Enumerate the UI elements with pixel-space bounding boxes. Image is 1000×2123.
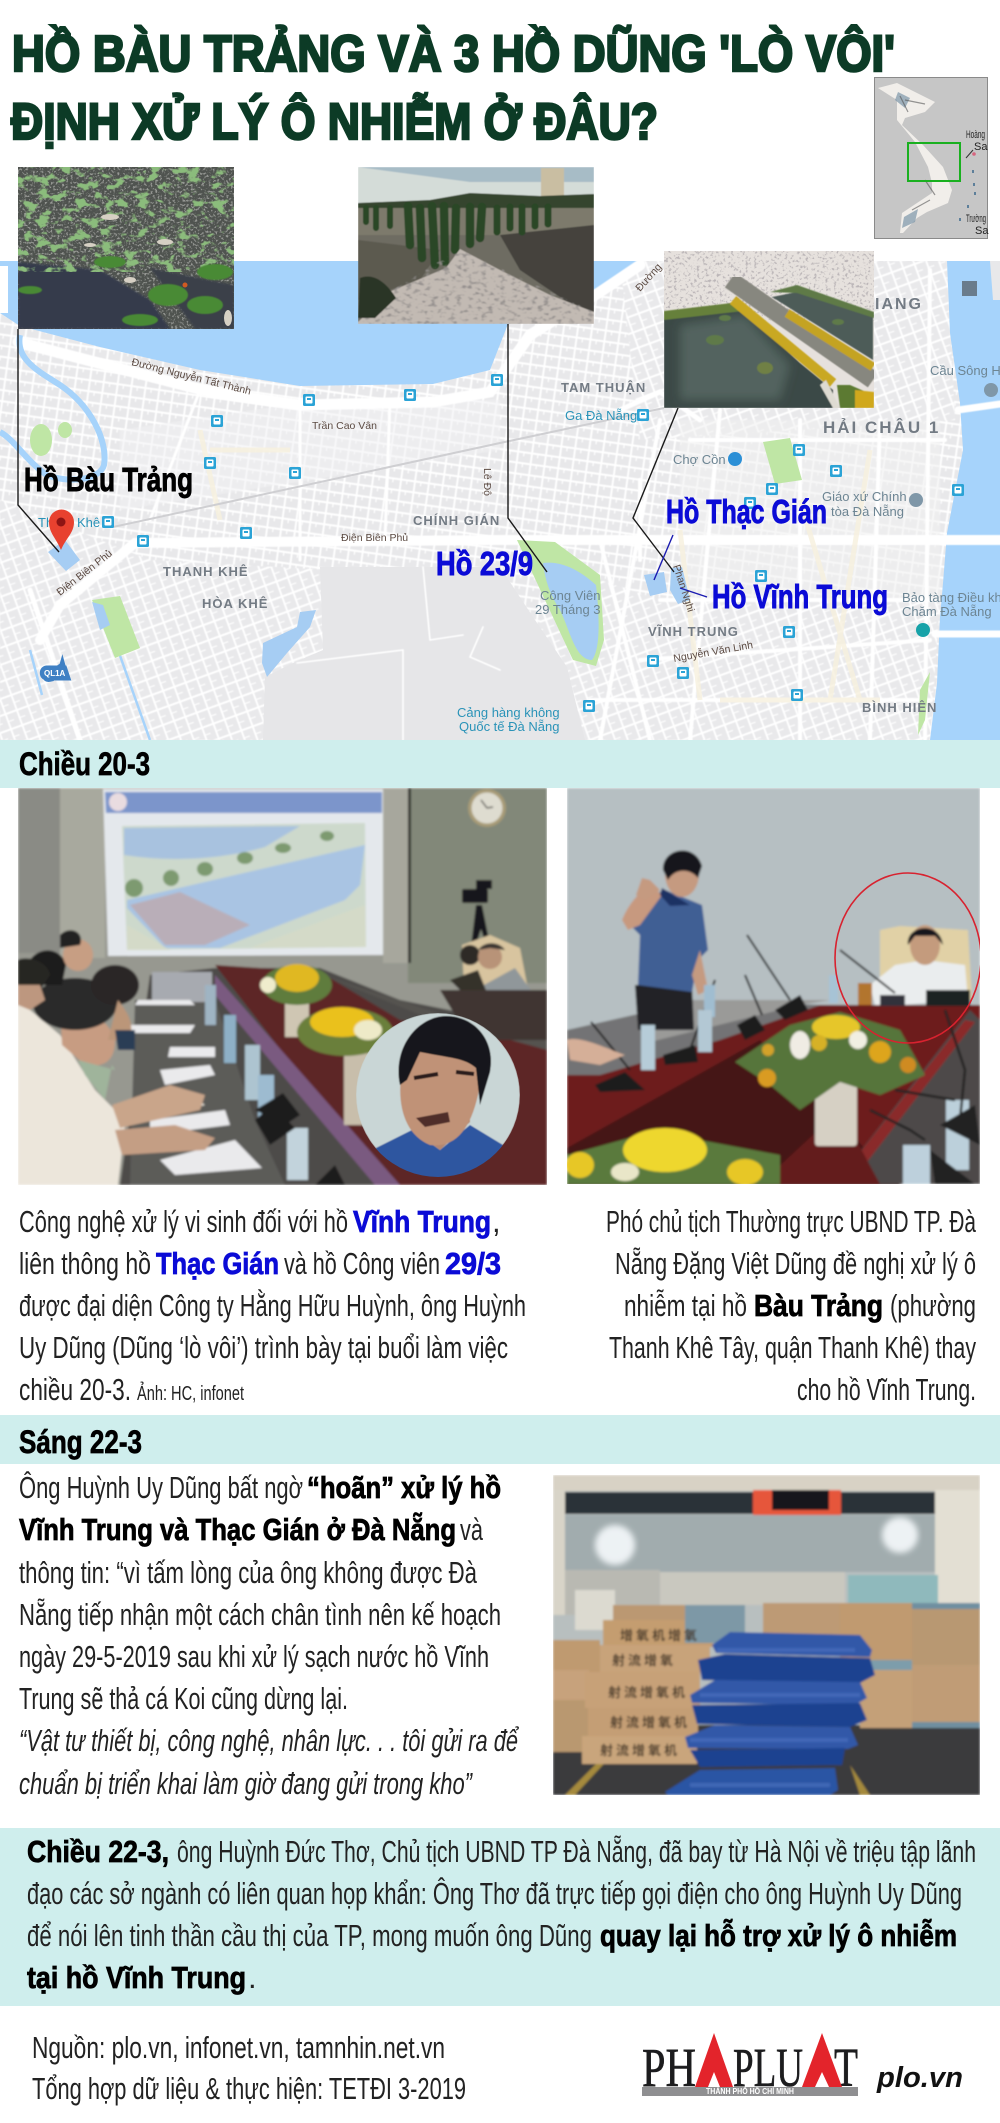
text: morning 22-3: chuẩn bị triển khai làm giờ đang gửi trong kho”	[19, 1766, 473, 1801]
map labels: Phan Nghi	[670, 563, 697, 614]
box lettering: 射流增氧	[612, 1653, 676, 1668]
text: technology caption: Công nghệ xử lý vi sinh đối với hồ	[19, 1204, 348, 1239]
grid icon	[962, 281, 977, 296]
map labels: Khê	[77, 515, 100, 530]
seated vice chairman	[840, 925, 972, 1006]
inset map of Vietnam: Sa	[975, 225, 989, 237]
white search box	[0, 266, 8, 313]
map labels: TAM THUẬN	[561, 380, 646, 395]
map labels: THANH KHÊ	[163, 564, 249, 579]
inset map of Vietnam: Hoàng	[966, 129, 985, 141]
microphones and bottles	[567, 935, 980, 1184]
text: morning 22-3: Ông Huỳnh Uy Dũng bất ngờ	[19, 1470, 303, 1505]
photo: dead fish at lake 23/9	[358, 167, 594, 324]
inset map of Vietnam: Sa	[974, 141, 988, 153]
left side attendees	[18, 930, 215, 1185]
logo: Phap Luat	[642, 2033, 858, 2098]
map labels: Điện Biên Phủ	[54, 547, 115, 598]
panel: afternoon 22-3: để nói lên tinh thần cầu thị của TP, mong muốn ông Dũng	[27, 1918, 592, 1953]
text: technology caption: 29/3	[445, 1246, 501, 1281]
label: Ho Bau Trang: Hồ Bàu Trảng	[24, 461, 193, 498]
text: vice chairman caption	[606, 1204, 977, 1407]
map pin	[49, 509, 74, 550]
map labels: QL1A	[44, 669, 66, 678]
right side attendees	[440, 935, 547, 1040]
airport area	[263, 567, 585, 740]
photo: aerial view of lakes	[664, 251, 874, 408]
clock	[468, 789, 506, 827]
river east	[930, 261, 1000, 740]
map labels: Chợ Cồn	[673, 452, 726, 467]
map labels: tòa Đà Nẵng	[831, 504, 904, 519]
text: morning 22-3: Vĩnh Trung và Thạc Gián ở Đà Nẵng	[19, 1511, 456, 1547]
river canals west	[0, 335, 150, 740]
text: morning 22-3: “Vật tư thiết bị, công nghệ, nhân lực. . . tôi gửi ra để	[19, 1723, 519, 1758]
vases and flowers	[260, 964, 393, 1125]
railway	[113, 408, 664, 527]
lakes	[48, 540, 690, 677]
photo: Bau Trang lake	[18, 167, 234, 329]
text: technology caption: được đại diện Công ty Hằng Hữu Huỳnh, ông Huỳnh	[19, 1288, 526, 1323]
section bar: Chieu 20-3: Chiều 20-3	[19, 746, 150, 782]
logo: Phap Luat: T	[834, 2037, 858, 2098]
conference table	[119, 966, 457, 1185]
map labels: Cầu Sông H	[930, 363, 1000, 378]
label: Ho Thac Gian: Hồ Thạc Gián	[666, 493, 827, 530]
box lettering: 增氧机增氧	[620, 1628, 700, 1643]
inset portrait of Huynh Uy Dung	[356, 1013, 520, 1182]
map labels: Giáo xứ Chính	[822, 489, 907, 504]
map labels: Quốc tế Đà Nẵng	[459, 719, 559, 734]
text: technology caption: Ảnh: HC, infonet	[137, 1382, 244, 1405]
map labels: Lê Độ	[481, 468, 493, 496]
text: technology caption: và hồ Công viên	[284, 1246, 440, 1281]
map labels: CHÍNH GIÁN	[413, 513, 500, 528]
label: Ho 23/9: Hồ 23/9	[436, 545, 533, 582]
map labels: Đường Nguyễn Tất Thành	[130, 355, 253, 398]
map labels: Trần Cao Vân	[312, 420, 377, 432]
text: morning 22-3: Nẵng tiếp nhận một cách chân tình nên kế hoạch	[19, 1597, 501, 1632]
source credits: Tổng hợp dữ liệu & thực hiện: TETĐI 3-2019	[32, 2071, 466, 2106]
panel: afternoon 22-3	[0, 1828, 1000, 2006]
logo: Phap Luat: THÀNH PHỐ HỒ CHÍ MINH	[706, 2086, 794, 2096]
map labels: Điện Biên Phủ	[341, 532, 408, 544]
video camera	[461, 879, 493, 942]
bus stop icons	[102, 374, 964, 712]
front flowers	[566, 1128, 780, 1185]
text: technology caption	[19, 1204, 526, 1407]
source credits	[32, 2030, 466, 2106]
map labels: BÌNH HIÊN	[862, 700, 937, 715]
map labels: Công Viên	[540, 588, 600, 603]
main roads	[18, 265, 1000, 740]
text: technology caption: Vĩnh Trung	[353, 1204, 491, 1239]
map of Da Nang	[0, 255, 1000, 745]
papers	[130, 1000, 262, 1175]
text: morning 22-3: “hoãn” xử lý hồ	[307, 1470, 501, 1505]
map labels: 29 Tháng 3	[535, 602, 601, 617]
map labels: Chăm Đà Nẵng	[902, 604, 992, 619]
map labels: Nguyễn Văn Linh	[672, 638, 754, 665]
map labels: IANG	[875, 296, 923, 313]
main vase and flower arrangement	[735, 1012, 925, 1146]
blue label leader lines	[654, 535, 707, 597]
section bar: Sang 22-3: Sáng 22-3	[19, 1424, 142, 1460]
standing man	[622, 851, 708, 1030]
photo: meeting with Huynh Uy Dung	[18, 788, 547, 1185]
title: HỒ BÀU TRẢNG VÀ 3 HỒ DŨNG 'LÒ VÔI'	[12, 24, 895, 82]
map labels: VĨNH TRUNG	[648, 624, 739, 639]
projector screen	[103, 789, 383, 956]
box lettering: 射流增氧机	[608, 1685, 688, 1700]
text: morning 22-3: Trung sẽ thả cá Koi cũng dừng lại.	[19, 1681, 348, 1716]
green parks	[30, 422, 930, 735]
logo: Phap Luat: PH	[642, 2037, 696, 2098]
map labels: HÒA KHÊ	[202, 596, 268, 611]
text: morning 22-3	[19, 1470, 519, 1801]
section bar: Chieu 20-3	[0, 740, 1000, 788]
panel: afternoon 22-3: .	[248, 1960, 257, 1995]
logo: plo.vn: plo.vn	[876, 2062, 963, 2094]
text: vice chairman caption: Bàu Trảng	[754, 1288, 883, 1323]
bottles and microphones	[205, 985, 345, 1185]
source credits: Nguồn: plo.vn, infonet.vn, tamnhin.net.vn	[32, 2030, 445, 2065]
blue floats stack	[665, 1632, 875, 1795]
map labels: HẢI CHÂU 1	[823, 418, 940, 437]
panel: afternoon 22-3: Chiều 22-3,	[27, 1834, 169, 1869]
map labels: Ga Đà Nẵng	[565, 408, 637, 423]
cardboard boxes	[553, 1603, 980, 1764]
map labels: Bảo tàng Điều kh	[902, 590, 1000, 605]
text: technology caption: ,	[492, 1204, 501, 1239]
inset map of Vietnam	[874, 78, 989, 238]
text: technology caption: liên thông hồ	[19, 1246, 151, 1281]
text: technology caption: Thạc Gián	[156, 1246, 279, 1281]
text: technology caption: chiều 20-3.	[19, 1372, 131, 1407]
warm side roads	[200, 430, 880, 700]
box lettering: 射流增氧机	[600, 1743, 680, 1758]
pointer lines to lakes	[18, 324, 678, 572]
map labels: Cảng hàng không	[457, 705, 560, 720]
text: morning 22-3: và	[460, 1512, 484, 1547]
text: morning 22-3: ngày 29-5-2019 sau khi xử lý sạch nước hồ Vĩnh	[19, 1639, 489, 1674]
text: vice chairman caption: nhiễm tại hồ	[624, 1288, 747, 1323]
photo: equipment in warehouse	[553, 1475, 980, 1795]
map labels: Đường	[633, 261, 665, 294]
title: ĐỊNH XỬ LÝ Ô NHIỄM Ở ĐÂU?	[11, 92, 658, 150]
section bar: Sang 22-3	[0, 1415, 1000, 1464]
photo: vice chairman at meeting	[566, 788, 981, 1185]
floor	[553, 1725, 980, 1795]
panel: afternoon 22-3: tại hồ Vĩnh Trung	[27, 1960, 246, 1995]
sea bay	[0, 261, 640, 386]
box lettering	[600, 1628, 700, 1758]
red highlight circle	[835, 873, 981, 1043]
text: technology caption: Uy Dũng (Dũng ‘lò vôi’) trình bày tại buổi làm việc	[19, 1330, 508, 1365]
title	[11, 24, 895, 150]
map labels: Th	[38, 515, 53, 530]
logo: Phap Luat: PLU	[733, 2037, 803, 2098]
map labels	[38, 261, 1000, 734]
box lettering: 射流增氧机	[610, 1715, 690, 1730]
place markers	[728, 383, 998, 637]
label: Ho Vinh Trung: Hồ Vĩnh Trung	[712, 578, 888, 615]
text: morning 22-3: thông tin: “vì tấm lòng của ông không được Đà	[19, 1555, 478, 1590]
